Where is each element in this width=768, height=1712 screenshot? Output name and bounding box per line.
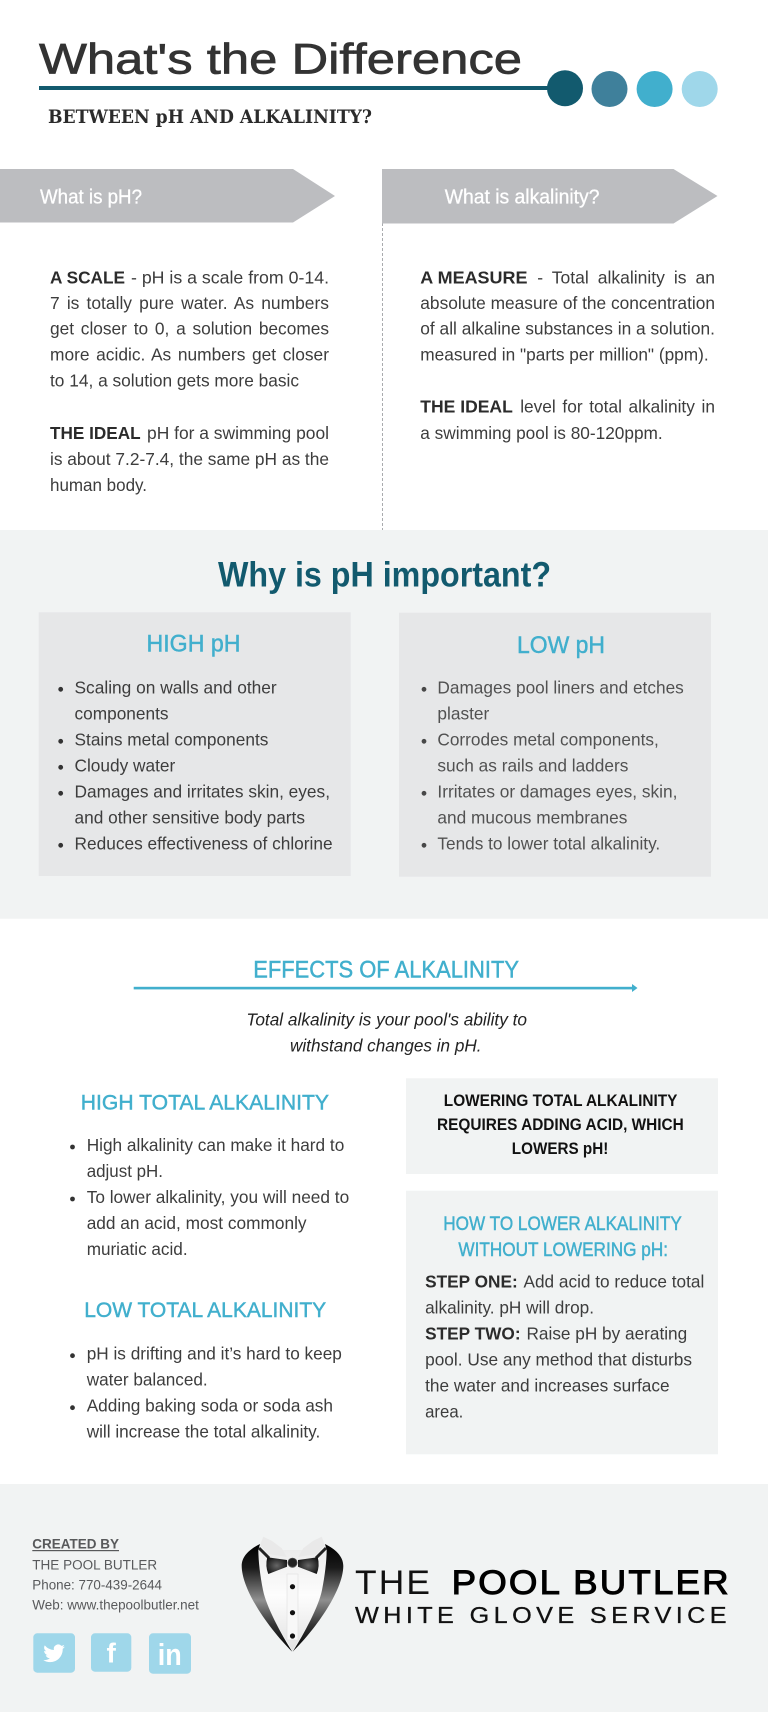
logo wordmark: POOL BUTLER: [452, 1564, 731, 1602]
icon: facebook: [91, 1633, 131, 1672]
text block: ideal alkalinity: a swimming pool is 80-120ppm.: [420, 423, 663, 443]
bullet list: high pH: Reduces effectiveness of chlorine: [74, 833, 333, 853]
bow tie: [266, 1557, 319, 1574]
icon: linkedin: in: [158, 1637, 182, 1672]
tuxedo shirt: [245, 1550, 340, 1651]
text block: pH scale: - pH is a scale from 0-14.: [131, 267, 329, 287]
text block: ideal pH: human body.: [50, 475, 147, 495]
bullet list: high pH: Stains metal components: [74, 729, 269, 749]
bullet list: low alkalinity: [70, 1344, 342, 1442]
step two: STEP TWO:: [425, 1324, 521, 1344]
bullet list: low pH: Irritates or damages eyes, skin,: [437, 781, 677, 801]
text block: alkalinity measure: - Total alkalinity is an: [537, 267, 715, 287]
bullet list: low pH: Damages pool liners and etches: [437, 677, 684, 697]
section: high total alkalinity: [70, 1090, 349, 1259]
footer: [0, 1484, 768, 1712]
bullet list: low alkalinity: pH is drifting and it’s hard to keep: [87, 1344, 342, 1364]
icon: facebook: f: [106, 1637, 116, 1668]
header: title block: [39, 35, 718, 128]
text block: ideal pH: is about 7.2-7.4, the same pH as the: [50, 449, 329, 469]
heading: high total alkalinity: HIGH TOTAL ALKALINITY: [81, 1090, 329, 1114]
text block: pH scale: more acidic. As numbers get closer: [50, 345, 329, 365]
step one: [425, 1272, 704, 1318]
bullet list: high pH: and other sensitive body parts: [74, 807, 305, 827]
logo wordmark: THE: [355, 1564, 432, 1602]
arrow banner: what is pH: [0, 169, 335, 222]
bullet list: low pH: and mucous membranes: [437, 807, 628, 827]
step two: [425, 1324, 692, 1422]
bullet list: low pH: plaster: [437, 703, 490, 723]
bullet list: high alkalinity: muriatic acid.: [87, 1239, 188, 1259]
text block: ideal pH: [50, 423, 329, 495]
panel: effects of alkalinity intro: [134, 956, 637, 1056]
panel: why is pH important: [0, 530, 768, 919]
text block: pH scale: get closer to 0, a solution becomes: [50, 319, 329, 339]
credits: Web: www.thepoolbutler.net: [32, 1597, 199, 1612]
icon: twitter: [33, 1633, 75, 1673]
text block: alkalinity measure: of all alkaline substances in a solution.: [420, 319, 715, 339]
step one: STEP ONE:: [425, 1272, 518, 1292]
title underline: [39, 86, 551, 90]
text block: ideal alkalinity: level for total alkalinity in: [520, 396, 715, 416]
callout: lowering alkalinity lowers pH: LOWERS pH!: [512, 1140, 608, 1158]
heading: low total alkalinity: LOW TOTAL ALKALINITY: [84, 1298, 326, 1322]
step two: pool. Use any method that disturbs: [425, 1350, 692, 1370]
bullet list: low alkalinity: Adding baking soda or soda ash: [87, 1396, 333, 1416]
tuxedo collar: [259, 1537, 326, 1558]
text block: pH scale: [50, 267, 329, 391]
text block: pH scale: A SCALE: [50, 267, 125, 287]
text block: intro sentence: withstand changes in pH.: [290, 1036, 482, 1056]
text block: intro sentence: [246, 1010, 527, 1056]
text block: alkalinity measure: A MEASURE: [420, 267, 528, 287]
bullet list: high alkalinity: [70, 1135, 349, 1259]
card heading: low pH: LOW pH: [517, 632, 605, 659]
shirt buttons: [290, 1584, 295, 1639]
bullet list: high pH: components: [74, 703, 169, 723]
text block: ideal alkalinity: [420, 396, 715, 443]
panel: how to lower alkalinity: [406, 1191, 718, 1454]
text block: intro sentence: Total alkalinity is your pool's ability to: [246, 1010, 527, 1030]
text block: alkalinity measure: absolute measure of the concentration: [420, 293, 715, 313]
heading: effects of alkalinity: EFFECTS OF ALKALINITY: [253, 956, 519, 983]
bullet list: low alkalinity: will increase the total alkalinity.: [86, 1422, 320, 1442]
title: What's the Difference: [39, 35, 522, 83]
callout: lowering alkalinity lowers pH: REQUIRES ADDING ACID, WHICH: [437, 1116, 684, 1134]
icon: linkedin: [149, 1633, 191, 1674]
step one: Add acid to reduce total: [524, 1272, 704, 1292]
text block: ideal pH: THE IDEAL: [50, 423, 141, 443]
text block: alkalinity measure: [420, 267, 715, 365]
credits: [32, 1537, 199, 1612]
credits: CREATED BY: [32, 1537, 119, 1552]
bullet list: low pH: Tends to lower total alkalinity.: [437, 833, 660, 853]
text block: pH scale: 7 is totally pure water. As numbers: [50, 293, 329, 313]
bullet list: high pH: [58, 677, 333, 853]
panel: what is alkalinity: [382, 169, 718, 443]
bullet list: high pH: Damages and irritates skin, eyes,: [74, 781, 330, 801]
callout: lowering alkalinity lowers pH: [406, 1078, 718, 1174]
card heading: high pH: HIGH pH: [146, 631, 240, 658]
step two: Raise pH by aerating: [526, 1324, 687, 1344]
bullet list: high pH: Scaling on walls and other: [74, 677, 277, 697]
logo: tuxedo: [242, 1537, 343, 1652]
heading: why is pH important: Why is pH important?: [218, 556, 551, 595]
text block: ideal alkalinity: THE IDEAL: [420, 396, 513, 416]
bullet list: low pH: Corrodes metal components,: [437, 729, 659, 749]
credits: Phone: 770-439-2644: [32, 1577, 162, 1592]
panel: what is pH: [0, 169, 335, 495]
text block: pH scale: to 14, a solution gets more basic: [50, 371, 299, 391]
bullet list: high alkalinity: To lower alkalinity, you will need to: [87, 1187, 349, 1207]
tuxedo lapels: [242, 1544, 343, 1652]
step two: area.: [425, 1402, 463, 1422]
bullet list: high alkalinity: High alkalinity can make it hard to: [87, 1135, 344, 1155]
bullet list: low alkalinity: water balanced.: [86, 1370, 208, 1390]
bullet list: high alkalinity: adjust pH.: [87, 1161, 163, 1181]
text block: alkalinity measure: measured in "parts per million" (ppm).: [420, 345, 709, 365]
panel heading: [443, 1213, 682, 1261]
bullet list: high pH: Cloudy water: [74, 755, 176, 775]
subtitle: BETWEEN pH AND ALKALINITY?: [48, 106, 372, 128]
placket: [287, 1574, 298, 1640]
section: low total alkalinity: [70, 1298, 342, 1442]
arrow banner: what is alkalinity: What is alkalinity?: [445, 186, 600, 208]
card: low pH: [399, 613, 711, 877]
panel heading: WITHOUT LOWERING pH:: [458, 1239, 668, 1261]
logo wordmark: WHITE GLOVE SERVICE: [355, 1602, 731, 1628]
arrow: teal rule: [134, 984, 637, 992]
arrow banner: what is pH: What is pH?: [40, 186, 142, 208]
credits: THE POOL BUTLER: [32, 1557, 157, 1572]
bullet list: high alkalinity: add an acid, most commonly: [87, 1213, 307, 1233]
bullet list: low pH: such as rails and ladders: [437, 755, 629, 775]
step one: alkalinity. pH will drop.: [425, 1298, 594, 1318]
panel heading: HOW TO LOWER ALKALINITY: [443, 1213, 682, 1235]
arrow banner: what is alkalinity: [382, 169, 718, 224]
card: high pH: [39, 612, 351, 876]
bullet list: low pH: [422, 677, 684, 853]
decorative dot row: [547, 70, 718, 107]
logo wordmark: [355, 1564, 731, 1628]
step two: the water and increases surface: [425, 1376, 670, 1396]
text block: ideal pH: pH for a swimming pool: [147, 423, 329, 443]
callout: lowering alkalinity lowers pH: LOWERING TOTAL ALKALINITY: [444, 1092, 677, 1110]
